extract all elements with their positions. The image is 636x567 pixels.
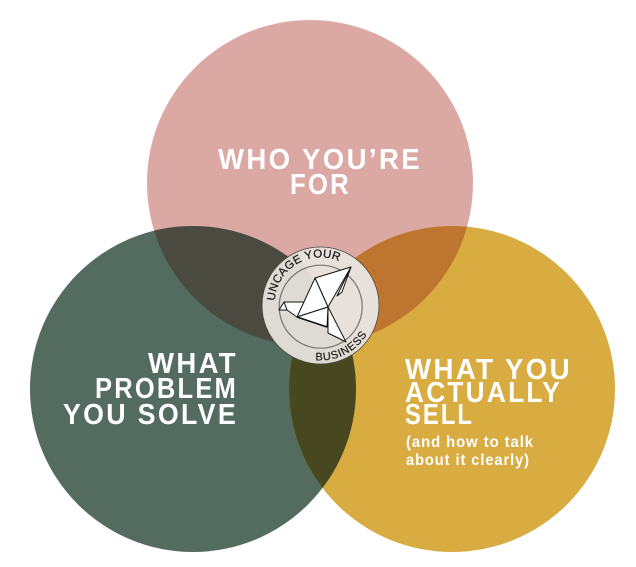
- circle: who you're for: [147, 20, 473, 346]
- heading: what problem you solve: WHAT: [148, 348, 238, 380]
- subheading: and how to talk about it clearly: (and how to talk: [406, 434, 534, 451]
- heading: what you actually sell: SELL: [405, 399, 474, 431]
- badge text: uncage your: UNCAGE YOUR: [266, 249, 340, 300]
- subheading: and how to talk about it clearly: about it clearly): [406, 452, 530, 469]
- badge warm tone: [298, 248, 378, 352]
- circle: what problem you solve: [30, 226, 356, 552]
- heading: who you're for: FOR: [290, 169, 351, 201]
- logo badge: [262, 246, 380, 364]
- heading: what you actually sell: WHAT YOU: [405, 354, 572, 386]
- heading: what problem you solve: YOU SOLVE: [63, 399, 238, 431]
- badge disc: [262, 247, 379, 364]
- heading: what you actually sell: [405, 354, 572, 431]
- heading: what problem you solve: PROBLEM: [95, 373, 238, 405]
- heading: what problem you solve: [63, 348, 238, 431]
- badge text: business: BUSINESS: [316, 331, 366, 360]
- overlap: pink and green: [154, 226, 288, 342]
- heading: who you're for: WHO YOU’RE: [218, 144, 422, 176]
- heading: what you actually sell: ACTUALLY: [405, 377, 562, 409]
- heading: who you're for: [218, 144, 422, 201]
- overlap: green and yellow: [289, 355, 356, 488]
- overlap: pink and yellow: [355, 226, 467, 334]
- icon: origami bird: [279, 267, 351, 342]
- subheading: and how to talk about it clearly: [406, 434, 534, 469]
- badge inner ring: [279, 265, 362, 348]
- circle: what you actually sell: [289, 226, 615, 552]
